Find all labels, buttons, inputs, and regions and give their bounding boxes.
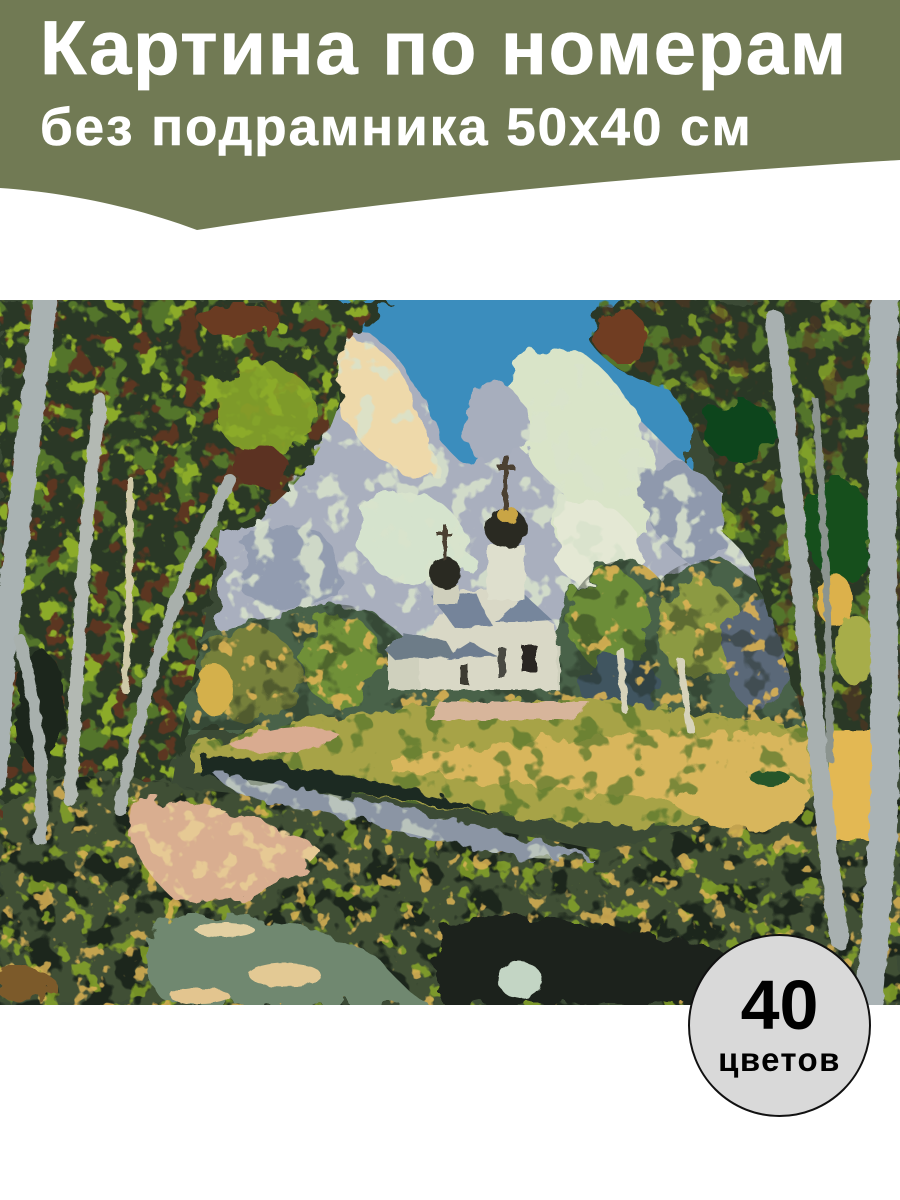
foreground: path, stream and dark water: [0, 730, 900, 1005]
badge: 40 colours: [688, 934, 871, 1117]
distant trees and meadow: [170, 560, 850, 826]
left tree canopy: [0, 300, 390, 830]
badge label: цветов: [718, 1041, 841, 1078]
painting: church among birch trees: [0, 300, 900, 1005]
subtitle: без подрамника 50х40 см: [40, 98, 753, 157]
badge number: 40: [741, 966, 818, 1044]
church: [385, 455, 560, 690]
sky: [220, 290, 760, 660]
banner: olive header with curved lower edge: [0, 0, 900, 230]
birch trunks: [0, 300, 885, 1000]
title: Картина по номерам: [40, 6, 848, 91]
right tree canopy: [590, 300, 900, 760]
